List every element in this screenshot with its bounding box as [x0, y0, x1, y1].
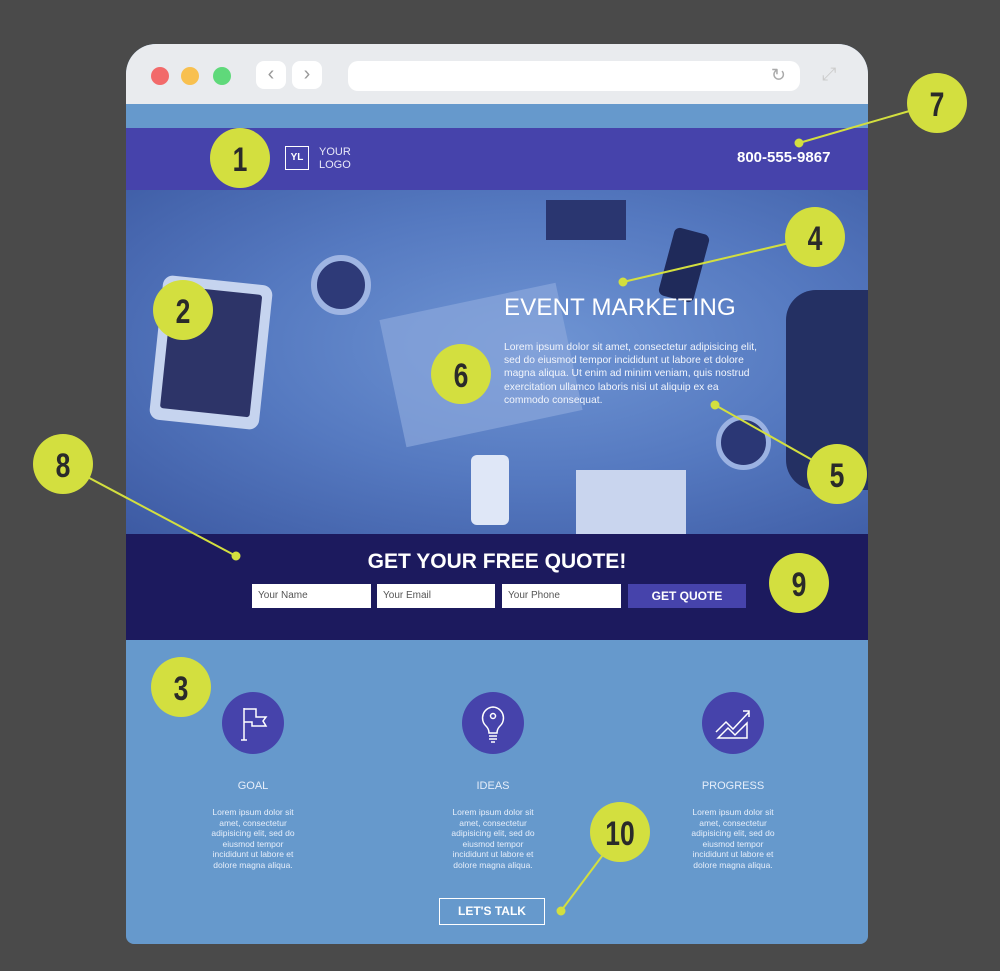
quote button: GET QUOTE [652, 589, 722, 603]
feature: progress [691, 692, 775, 870]
header bar: YOUR [319, 146, 351, 158]
browser chrome bar: ↻ [771, 65, 786, 85]
form fields: Your Name [258, 590, 308, 601]
callout 9: 9 [792, 566, 806, 604]
hero [126, 190, 868, 534]
callout 8: 8 [56, 447, 70, 485]
feature: ideas: IDEAS [476, 780, 510, 792]
quote band [126, 534, 868, 640]
callout 4: 4 [808, 220, 822, 258]
browser window [126, 44, 868, 944]
feature: progress: PROGRESS [702, 780, 764, 792]
callout 9 [769, 553, 829, 613]
browser chrome bar: › [304, 63, 310, 85]
callout 10 [590, 802, 650, 862]
lets talk button: LET'S TALK [458, 904, 526, 918]
form fields [252, 584, 371, 608]
quote heading: GET YOUR FREE QUOTE! [368, 550, 626, 573]
hero title: EVENT MARKETING [504, 294, 736, 321]
callout 5: 5 [830, 457, 844, 495]
logo: YL [291, 152, 303, 163]
browser chrome bar: ‹ [268, 63, 274, 85]
callout 4 [785, 207, 845, 267]
browser window: Your Phone [508, 590, 560, 601]
browser window: Your Email [383, 590, 431, 601]
header bar [126, 128, 868, 190]
callout 3: 3 [174, 670, 188, 708]
feature: progress: Lorem ipsum dolor sit amet, consectetur adipisicing elit, sed do eiusmod tempor incididunt ut labore et dolore magna aliqua. [691, 807, 775, 870]
header bar: LOGO [319, 159, 351, 171]
feature: goal [211, 692, 295, 870]
hero text: Lorem ipsum dolor sit amet, consectetur adipisicing elit, sed do eiusmod tempor incididunt ut labore et dolore magna aliqua. Ut enim ad minim veniam, quis nostrud exercitation ullamco laboris nisi ut aliquip ex ea commodo consequat. [504, 342, 757, 406]
quote button [628, 584, 746, 608]
callout 7: 7 [930, 86, 944, 124]
feature: goal: Lorem ipsum dolor sit amet, consectetur adipisicing elit, sed do eiusmod tempor incididunt ut labore et dolore magna aliqua. [211, 807, 295, 870]
callout 1 [210, 128, 270, 188]
browser chrome bar [126, 44, 868, 104]
feature: ideas: Lorem ipsum dolor sit amet, consectetur adipisicing elit, sed do eiusmod tempor incididunt ut labore et dolore magna aliqua. [451, 807, 535, 870]
callout 6: 6 [454, 357, 468, 395]
feature: ideas [451, 692, 535, 870]
callout 8 [33, 434, 93, 494]
callout 6 [431, 344, 491, 404]
callout 5 [807, 444, 867, 504]
logo [285, 146, 309, 170]
callout 2: 2 [176, 293, 190, 331]
callout 7 [907, 73, 967, 133]
callout 10: 10 [605, 815, 635, 853]
feature: goal: GOAL [238, 780, 268, 792]
browser chrome bar: ⤢ [822, 64, 836, 84]
phone: 800-555-9867 [737, 149, 830, 166]
lets talk button [439, 898, 545, 925]
callout 1: 1 [233, 141, 247, 179]
callout 2 [153, 280, 213, 340]
callout 3 [151, 657, 211, 717]
